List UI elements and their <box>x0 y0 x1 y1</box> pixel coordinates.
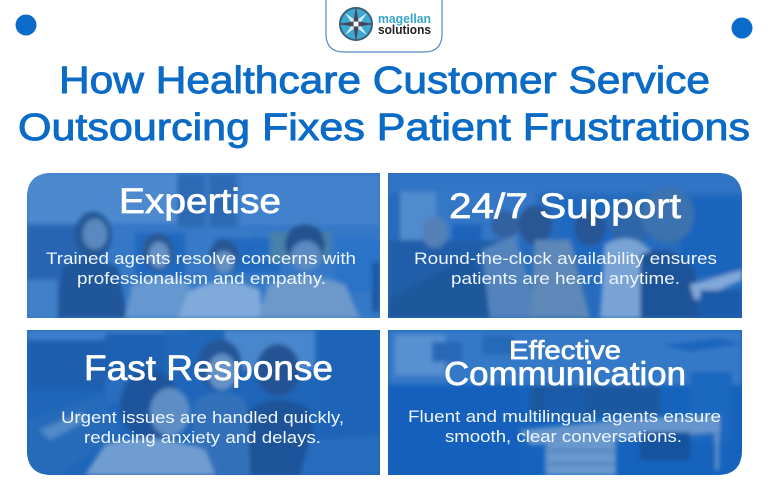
heading: expertise: Expertise <box>119 182 281 221</box>
body: 24/7 support <box>414 249 717 288</box>
heading: 24/7 support: 24/7 Support <box>449 187 681 226</box>
heading: effective communication: Effective <box>509 335 621 365</box>
body: fast response: Urgent issues are handled quickly, <box>61 408 344 427</box>
body: expertise: professionalism and empathy. <box>77 269 326 288</box>
title <box>18 60 750 149</box>
title: Outsourcing Fixes Patient Frustrations <box>18 107 750 149</box>
body: effective communication <box>408 407 721 446</box>
body: fast response <box>61 408 344 447</box>
logo wordmark: magellan <box>378 12 431 26</box>
photo: empty office <box>388 330 742 475</box>
icon: compass <box>338 6 374 42</box>
panel: fast response <box>27 330 380 475</box>
logo badge <box>326 0 442 52</box>
logo wordmark: solutions <box>378 23 431 37</box>
panel: effective communication <box>388 330 742 475</box>
panel: expertise <box>27 173 380 318</box>
heading: effective communication: Communication <box>444 355 686 392</box>
heading: effective communication <box>444 335 686 392</box>
photo: team of agents <box>27 173 380 318</box>
body: effective communication: Fluent and multilingual agents ensure <box>408 407 721 426</box>
decorative dot: right <box>732 18 752 38</box>
body: fast response: reducing anxiety and delays. <box>84 428 321 447</box>
body: 24/7 support: patients are heard anytime. <box>451 269 680 288</box>
heading: fast response: Fast Response <box>84 349 333 388</box>
body: expertise <box>46 249 356 288</box>
photo: agents with headsets <box>27 330 380 475</box>
title: How Healthcare Customer Service <box>59 60 710 102</box>
body: expertise: Trained agents resolve concerns with <box>46 249 356 268</box>
photo: call centre floor <box>388 173 742 318</box>
logo wordmark <box>378 12 431 37</box>
decorative dot: left <box>16 14 36 36</box>
panel: 24/7 support <box>388 173 742 318</box>
body: 24/7 support: Round-the-clock availability ensures <box>414 249 717 268</box>
body: effective communication: smooth, clear conversations. <box>445 427 682 446</box>
